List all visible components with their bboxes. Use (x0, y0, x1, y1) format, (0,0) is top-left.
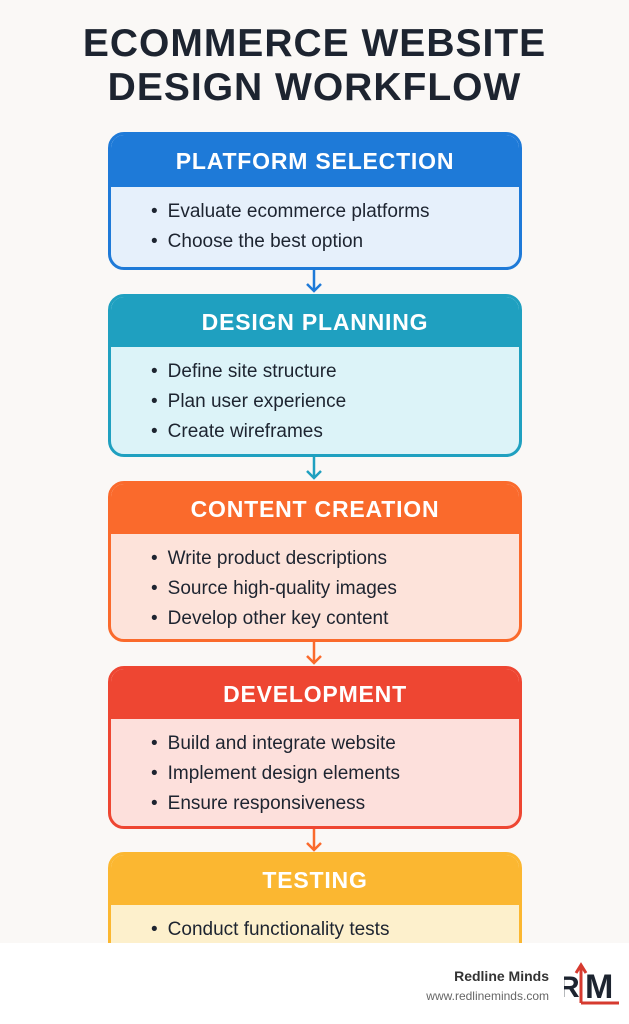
panel: platform selection (108, 132, 522, 270)
arrow 1 (306, 270, 322, 293)
text: design bullets: Create wireframes (168, 421, 323, 442)
heading: development: DEVELOPMENT (223, 680, 407, 706)
panel: development (108, 666, 522, 829)
arrow 4 (306, 829, 322, 852)
heading: testing (111, 855, 519, 905)
icon: logo: M (585, 968, 613, 1006)
text: platform bullets: Choose the best option (168, 231, 363, 252)
text: content bullets: Source high-quality images (168, 578, 397, 599)
title: ECOMMERCE WEBSITE (83, 22, 546, 65)
text: development bullets: Ensure responsiveness (168, 793, 365, 814)
panel: design planning (108, 294, 522, 457)
panel: testing (108, 852, 522, 992)
heading: design planning: DESIGN PLANNING (202, 308, 428, 334)
text: design bullets (152, 361, 346, 442)
arrow 2 (306, 457, 322, 480)
title (83, 22, 546, 109)
heading: design planning (111, 297, 519, 347)
text: content bullets: Write product descriptions (168, 548, 387, 569)
text: platform bullets (152, 201, 430, 252)
text: content bullets: Develop other key content (168, 608, 388, 629)
brand text: Redline Minds (454, 968, 549, 984)
heading: content creation (111, 484, 519, 534)
text: platform bullets: Evaluate ecommerce platforms (168, 201, 430, 222)
heading: content creation: CONTENT CREATION (191, 496, 439, 522)
text: content bullets (152, 548, 397, 629)
brand text: www.redlineminds.com (426, 989, 549, 1003)
text: development bullets (152, 733, 400, 814)
heading: platform selection: PLATFORM SELECTION (176, 148, 454, 174)
text: development bullets: Implement design elements (168, 763, 400, 784)
heading: platform selection (111, 135, 519, 187)
icon: logo (564, 962, 619, 1006)
panel: content creation (108, 481, 522, 642)
heading: testing: TESTING (262, 866, 368, 892)
text: testing bullets: Conduct functionality tests (168, 919, 389, 940)
text: development bullets: Build and integrate website (168, 733, 396, 754)
brand text (426, 968, 549, 1003)
text: design bullets: Plan user experience (168, 391, 346, 412)
text: design bullets: Define site structure (168, 361, 337, 382)
title: DESIGN WORKFLOW (108, 66, 521, 109)
heading: development (111, 669, 519, 719)
footer (0, 943, 629, 1024)
arrow 3 (306, 642, 322, 665)
